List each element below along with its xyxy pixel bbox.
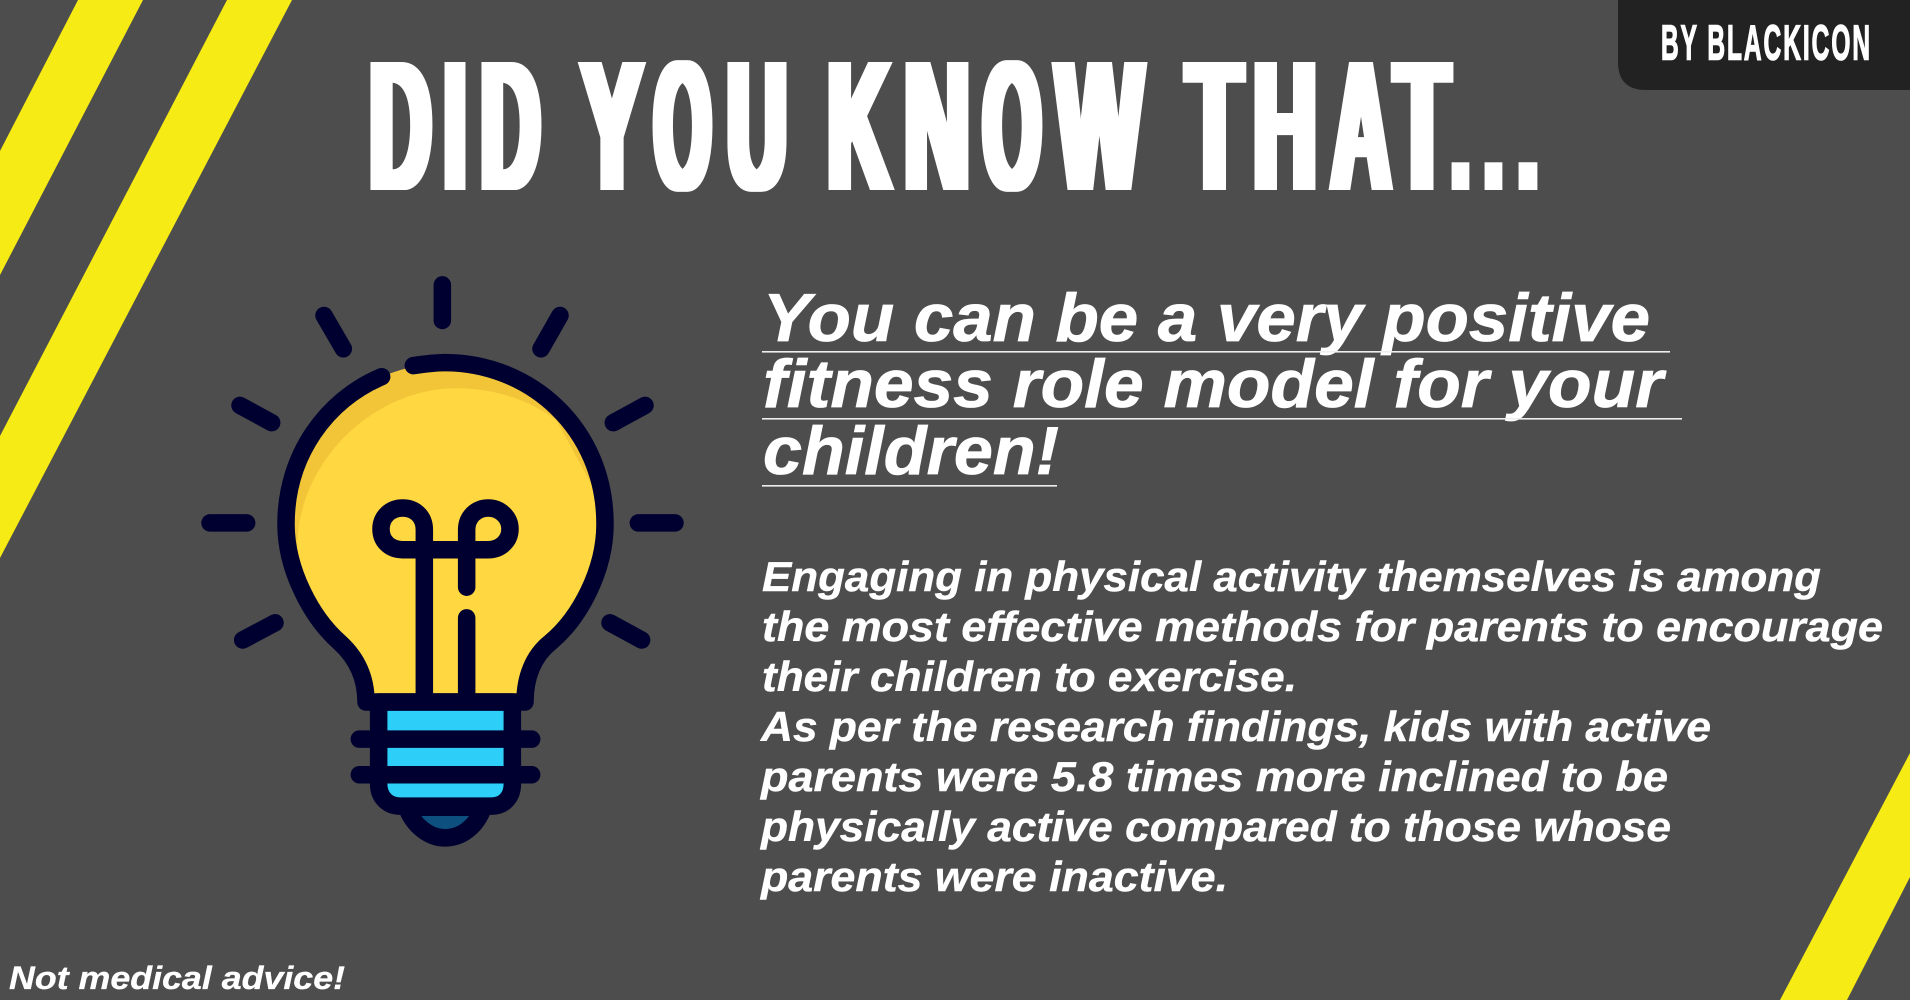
filament <box>381 508 510 700</box>
decorative yellow stripe bottom right <box>1780 753 1910 1000</box>
body text: their children to exercise. <box>762 653 1297 700</box>
heading: children! <box>763 413 1059 489</box>
screw base <box>359 702 532 838</box>
title: H <box>1254 22 1316 229</box>
decorative yellow stripes top left <box>0 0 292 558</box>
text: T <box>1395 22 1449 229</box>
title: I <box>444 22 466 229</box>
title <box>370 22 1537 229</box>
body text: Engaging in physical activity themselves is among <box>762 553 1821 600</box>
title: T <box>1187 22 1242 229</box>
light rays <box>210 285 675 640</box>
body text: physically active compared to those whose <box>760 803 1671 850</box>
footer disclaimer: Not medical advice! <box>9 960 345 996</box>
text: . <box>1486 22 1501 229</box>
heading: fitness role model for your <box>763 346 1667 422</box>
body text: the most effective methods for parents to encourage <box>762 603 1883 650</box>
body text: parents were 5.8 times more inclined to be <box>760 753 1668 800</box>
title: U <box>728 22 787 229</box>
title: D <box>370 22 431 229</box>
icon: light bulb <box>210 285 675 838</box>
text: . <box>1453 22 1468 229</box>
heading <box>762 280 1682 489</box>
badge: by blackicon <box>1618 0 1910 90</box>
body text <box>760 553 1883 900</box>
title: Y <box>581 22 643 229</box>
body text: As per the research findings, kids with active <box>760 703 1711 750</box>
title: O <box>984 22 1041 229</box>
title: K <box>828 22 891 229</box>
bulb glass <box>294 368 596 694</box>
text: . <box>1519 22 1537 229</box>
title: W <box>1056 22 1144 229</box>
text: A <box>1332 22 1391 229</box>
bulb outline <box>286 363 605 702</box>
title: D <box>481 22 540 229</box>
body text: parents were inactive. <box>760 853 1228 900</box>
heading: You can be a very positive <box>763 280 1650 356</box>
title: O <box>655 22 711 229</box>
title: N <box>904 22 969 229</box>
